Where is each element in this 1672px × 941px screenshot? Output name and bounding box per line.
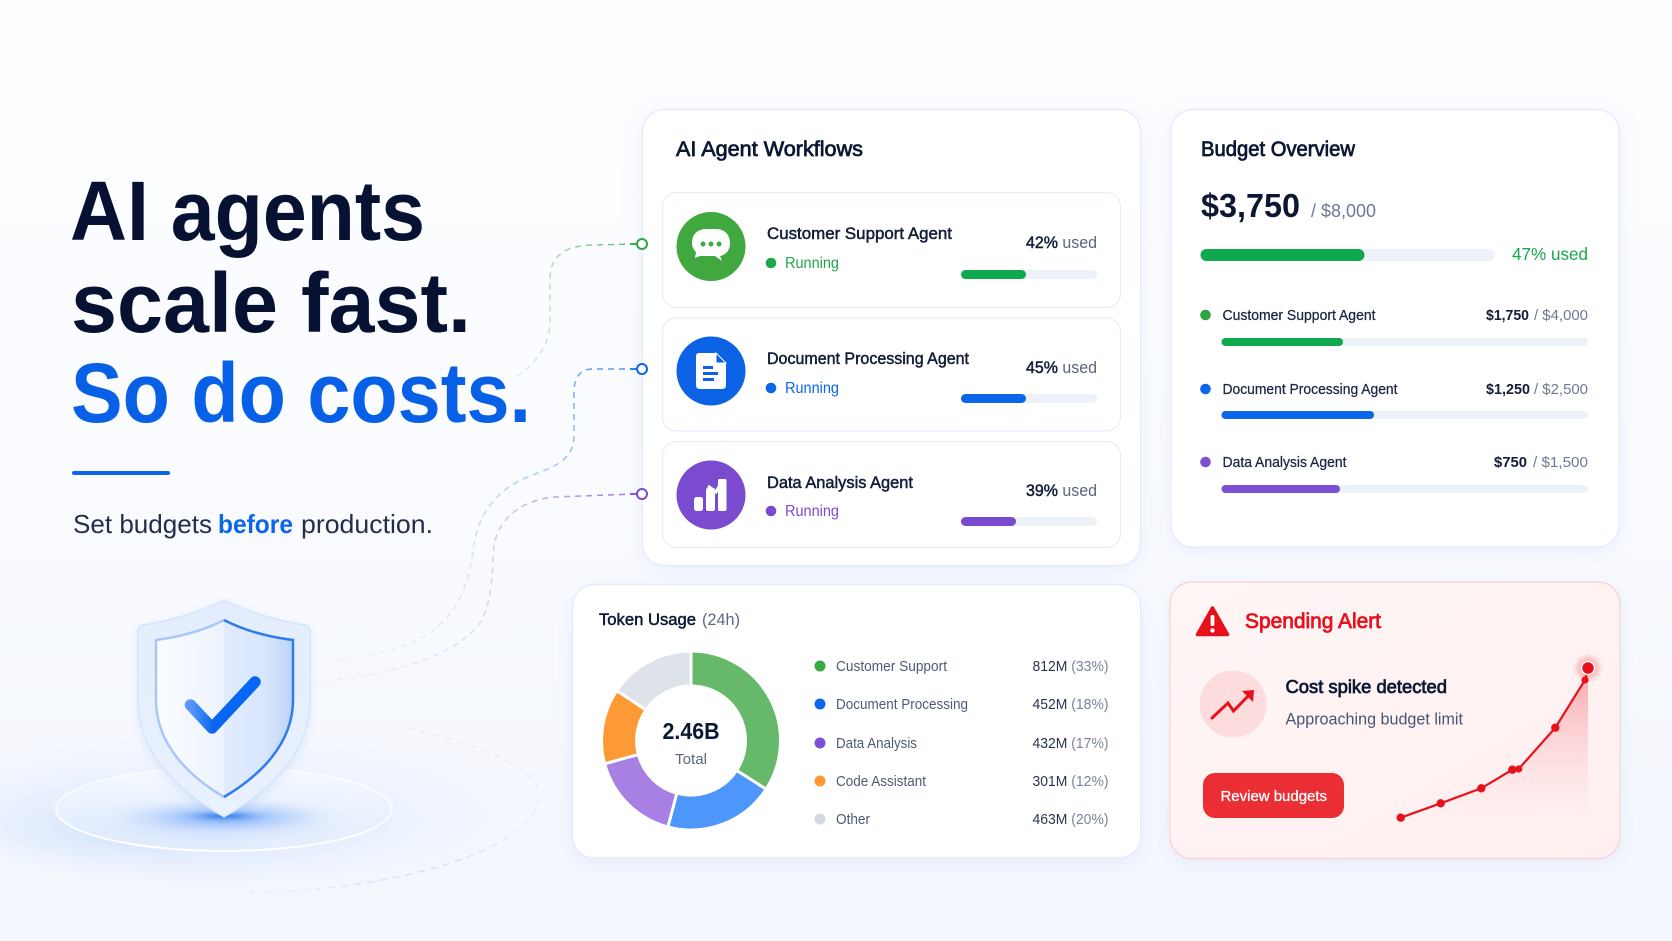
total spend [1201, 187, 1376, 224]
alert text: Approaching budget limit [1286, 710, 1463, 728]
row: data analysis agent: Running [785, 503, 839, 520]
row: document processing agent [662, 318, 1120, 431]
budget row: document processing [1200, 382, 1588, 419]
total spend: $3,750 [1201, 187, 1300, 224]
row: customer support agent: Customer Support Agent [767, 224, 952, 243]
icon: shield with check [114, 600, 334, 834]
alert text [1286, 676, 1463, 728]
icon: warning triangle [1198, 608, 1228, 634]
total spend: / $8,000 [1311, 201, 1376, 221]
legend [814, 659, 1108, 828]
subheading: before [218, 509, 293, 539]
row: customer support agent [662, 192, 1120, 308]
row: data analysis agent [662, 442, 1120, 548]
donut total: Total [675, 751, 707, 768]
heading: Budget Overview: Budget Overview [1201, 138, 1356, 161]
donut chart [592, 650, 779, 842]
heading: Token Usage: (24h) [702, 610, 740, 629]
budget row: data analysis: / $1,500 [1533, 455, 1588, 471]
legend: 301M (12%) [1032, 774, 1108, 790]
total progress bar [1200, 244, 1588, 264]
subheading: production. [301, 509, 433, 539]
budget row: data analysis: Data Analysis Agent [1222, 455, 1346, 471]
button: review budgets [1203, 773, 1344, 818]
heading: AI Agent Workflows: AI Agent Workflows [676, 138, 863, 161]
panel: AI agent workflows [642, 110, 1140, 566]
budget row: data analysis [1200, 455, 1588, 493]
panel: budget overview [1171, 110, 1619, 547]
subheading: Set budgets [73, 509, 212, 539]
accent rule [72, 471, 170, 475]
icon: trend up [1200, 670, 1266, 738]
row: document processing agent: Running [785, 380, 839, 397]
headline: AI agents [70, 164, 425, 258]
row: data analysis agent: 39% used [1026, 482, 1097, 500]
budget row: document processing: Document Processing Agent [1222, 382, 1398, 398]
row: document processing agent: Document Processing Agent [767, 349, 969, 368]
panel: spending alert [1170, 582, 1620, 858]
legend: Other [836, 812, 870, 828]
button: review budgets: Review budgets [1220, 788, 1327, 805]
legend: Document Processing [836, 697, 968, 713]
legend: 812M (33%) [1032, 659, 1108, 675]
row: document processing agent: 45% used [1026, 359, 1097, 377]
donut total [662, 718, 720, 768]
legend: Customer Support [836, 659, 947, 675]
row: customer support agent: Running [785, 255, 839, 272]
heading: Token Usage: Token Usage [599, 610, 696, 629]
budget row: customer support: $1,750 [1486, 308, 1529, 324]
illustration: glowing ground rings [0, 728, 545, 896]
headline [70, 164, 531, 440]
legend: 452M (18%) [1032, 697, 1108, 713]
legend: 463M (20%) [1032, 812, 1108, 828]
budget row: customer support: / $4,000 [1534, 308, 1588, 324]
headline: So do costs. [71, 346, 531, 440]
donut total: 2.46B [662, 718, 720, 744]
row: customer support agent: 42% used [1026, 234, 1097, 252]
panel: token usage [572, 584, 1140, 858]
budget row: document processing: / $2,500 [1534, 382, 1588, 398]
legend: 432M (17%) [1032, 736, 1108, 752]
budget row: data analysis: $750 [1494, 455, 1527, 471]
connector nodes [630, 239, 647, 499]
headline: scale fast. [71, 256, 471, 350]
legend: Code Assistant [836, 774, 926, 790]
heading: Spending Alert: Spending Alert [1245, 610, 1381, 633]
legend: Data Analysis [836, 736, 917, 752]
total progress bar: 47% used [1512, 244, 1588, 264]
row: data analysis agent: Data Analysis Agent [767, 473, 913, 492]
line chart: cost spike [1396, 653, 1603, 825]
budget row: customer support [1200, 308, 1588, 346]
connector lines from agents [318, 244, 636, 682]
budget row: document processing: $1,250 [1486, 382, 1530, 398]
alert text: Cost spike detected [1286, 676, 1447, 697]
budget row: customer support: Customer Support Agent [1222, 308, 1376, 324]
